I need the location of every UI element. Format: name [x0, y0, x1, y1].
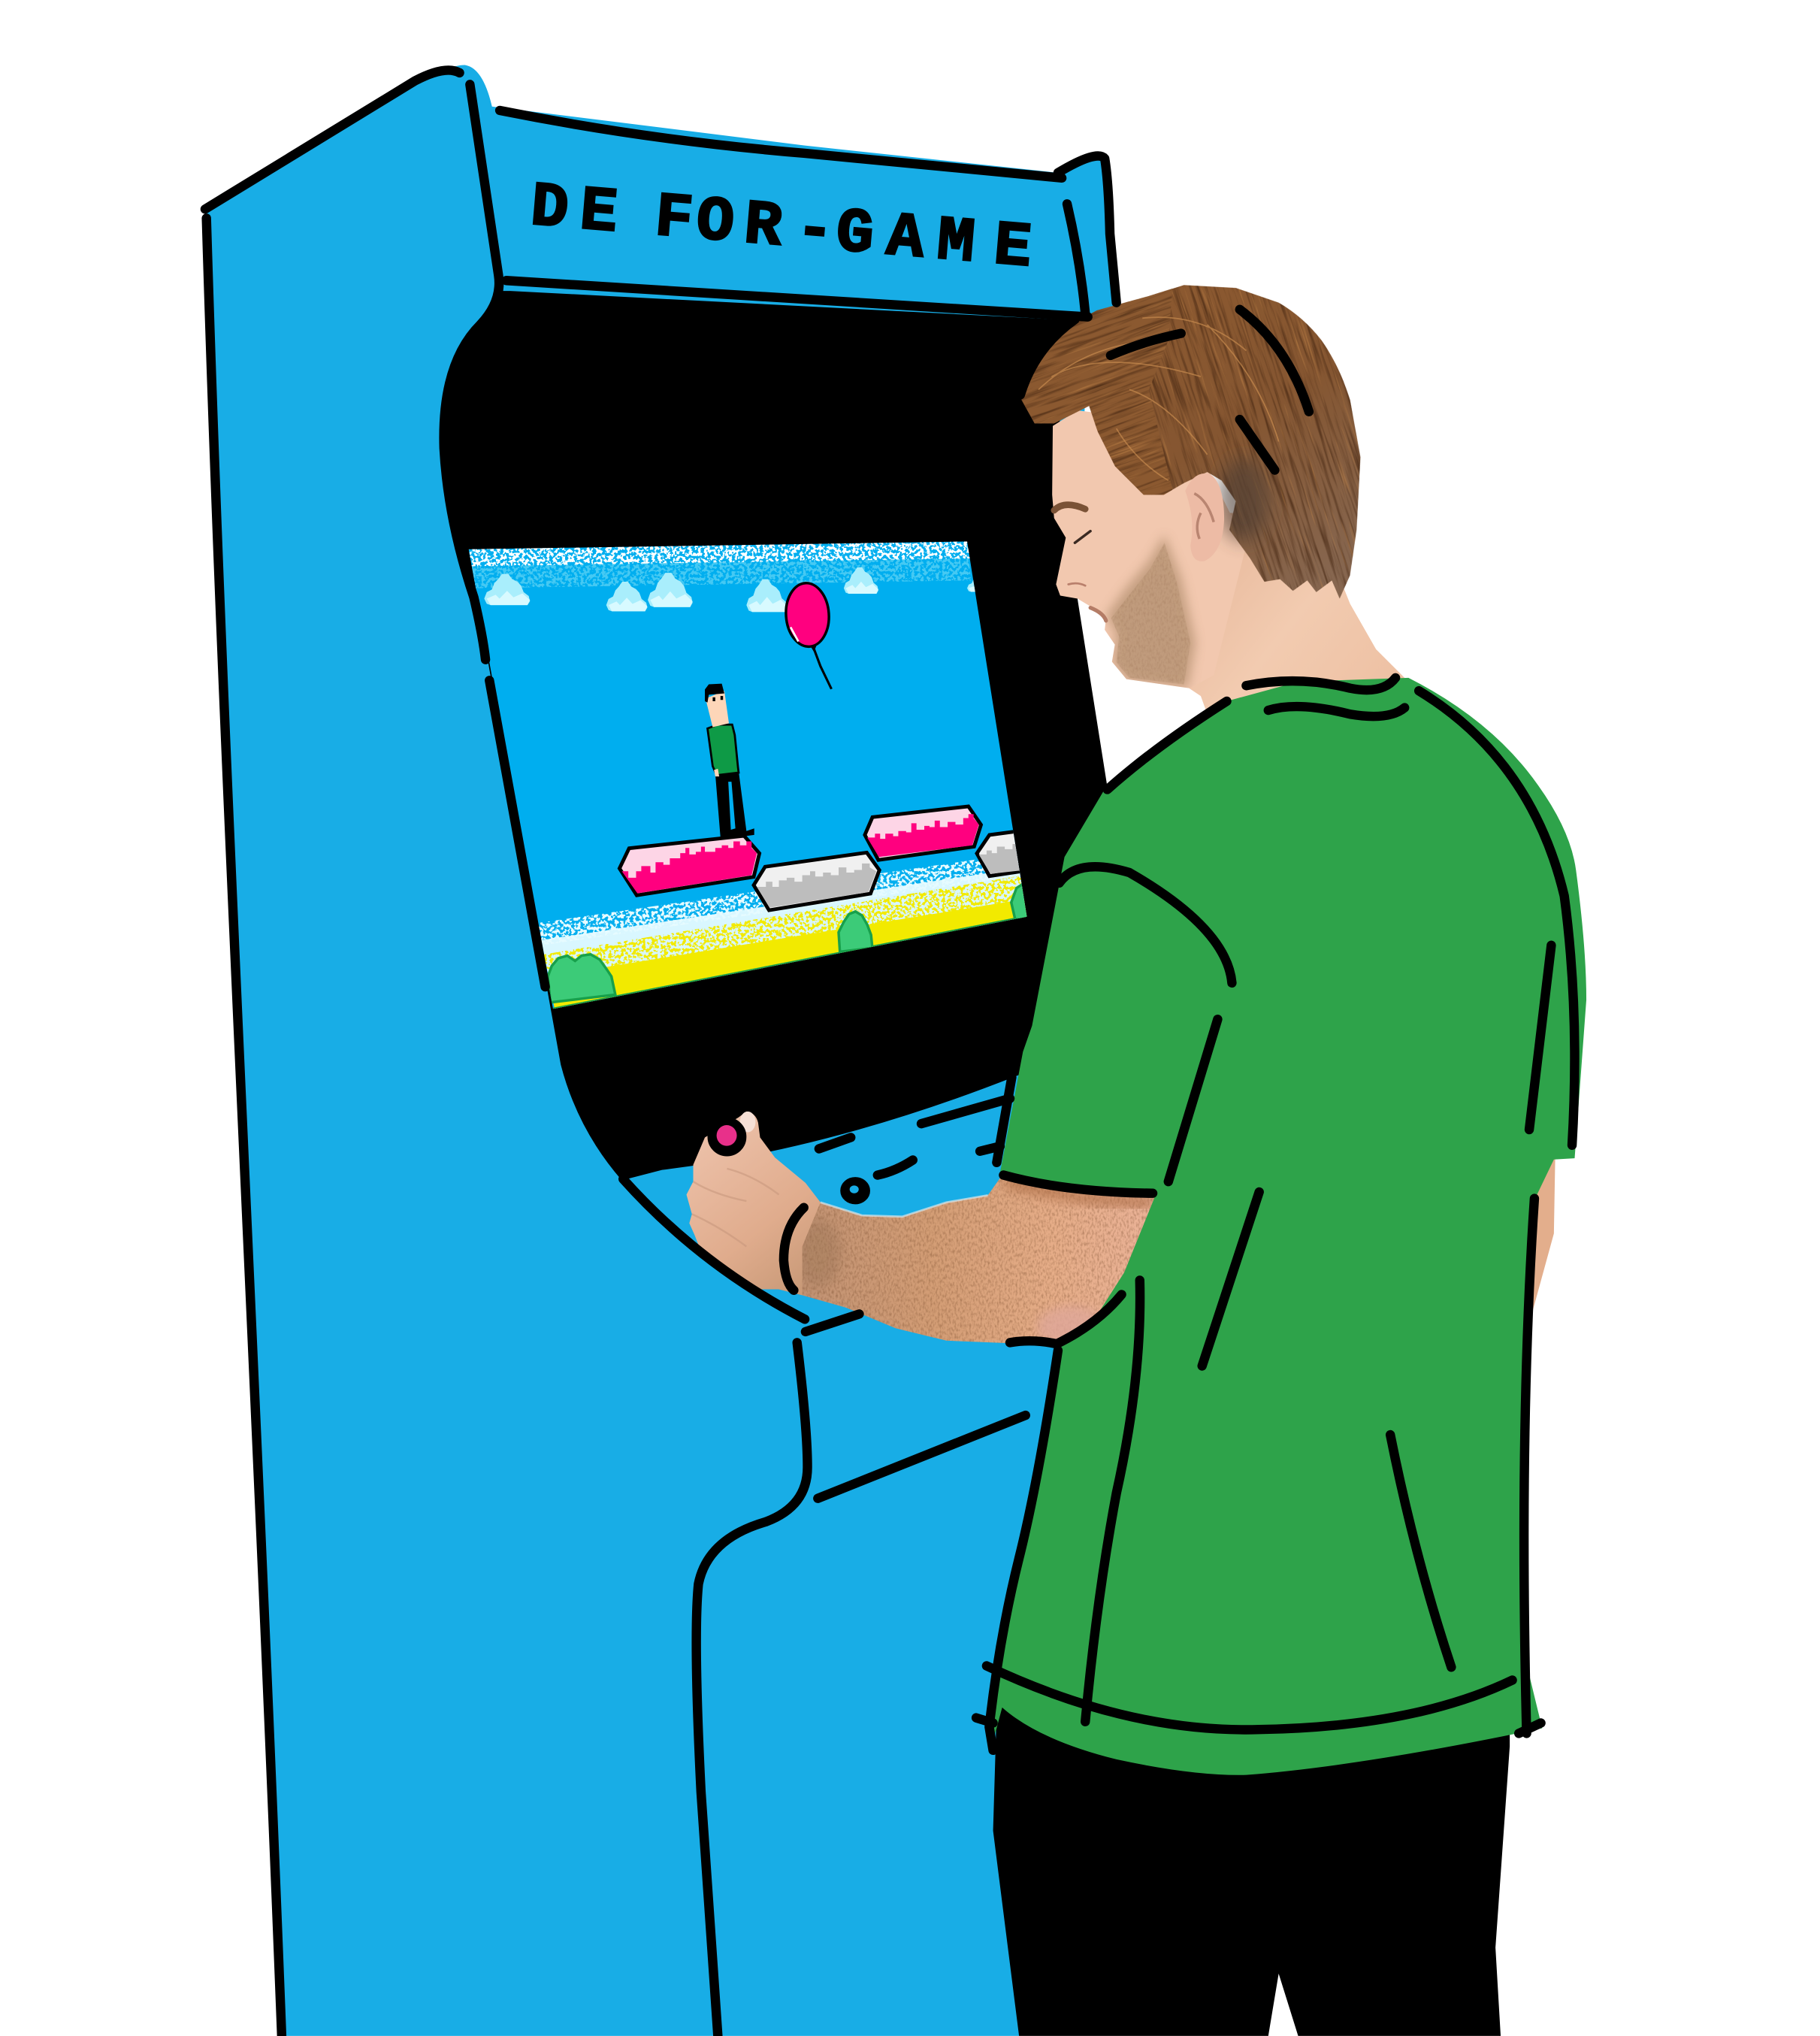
pink platform left — [619, 836, 760, 895]
hair highlight strands — [1038, 317, 1279, 480]
screen bezel — [444, 291, 1108, 1180]
forearm — [779, 1175, 1156, 1343]
eyebrow and eye — [1054, 505, 1106, 621]
knuckle shading — [692, 1169, 779, 1247]
trousers — [993, 1701, 1510, 2036]
control panel buttons — [819, 1077, 1011, 1175]
grey platform — [754, 852, 879, 910]
game screen — [461, 532, 1038, 1026]
balloon — [784, 582, 831, 689]
arcade cabinet — [207, 65, 1122, 2036]
hair marker strokes — [1020, 310, 1309, 470]
thumb nail — [740, 1112, 755, 1133]
neck — [1168, 513, 1408, 740]
t-shirt — [989, 678, 1586, 1775]
man's head — [1021, 285, 1405, 709]
cabinet body — [207, 65, 1122, 2036]
player sprite — [705, 684, 754, 837]
ear — [1185, 473, 1224, 561]
bushes — [548, 880, 1032, 1003]
sky dither band — [469, 537, 971, 588]
shirt and arm marker lines — [784, 678, 1574, 1750]
hair shading behind ear — [1217, 458, 1270, 541]
man's arm and hand — [687, 1112, 1156, 1348]
round start button — [844, 1181, 866, 1200]
joystick — [711, 1121, 743, 1153]
marquee text: DE FOR-GAME — [528, 171, 1034, 284]
beard — [1106, 535, 1196, 688]
face — [1052, 410, 1246, 688]
hair back — [930, 186, 1453, 698]
cabinet marker lines — [205, 70, 1117, 2036]
clouds — [484, 567, 995, 612]
ground — [538, 858, 1026, 1009]
grey platform clipped at screen edge — [975, 830, 1020, 878]
hand — [687, 1112, 821, 1295]
pink platform right — [865, 806, 981, 860]
hair front sweep — [1021, 289, 1172, 495]
forearm light halo — [821, 1195, 988, 1217]
man's far arm sliver — [1529, 1149, 1555, 1314]
sleeve shadow and elbow tint — [794, 1181, 1153, 1348]
sky — [461, 532, 1038, 1026]
